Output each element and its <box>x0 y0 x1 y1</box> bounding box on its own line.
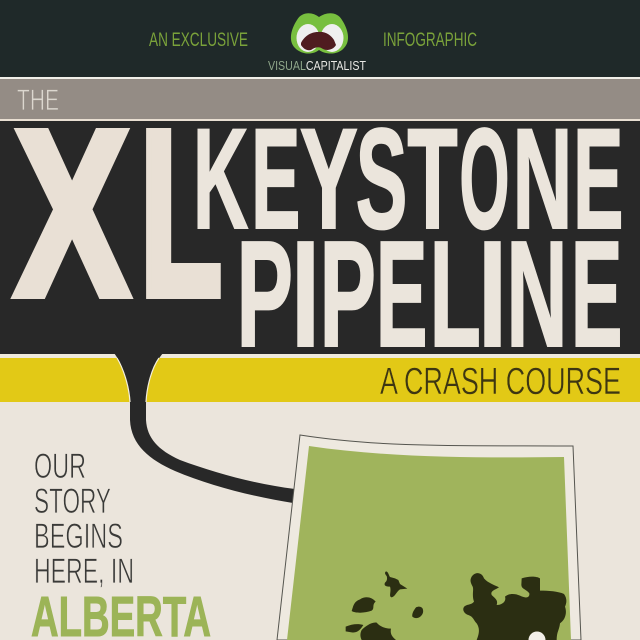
header text: infographic: INFOGRAPHIC <box>383 30 477 51</box>
band: the <box>0 79 640 121</box>
title: keystone: K <box>193 100 248 259</box>
story intro text: HERE, IN <box>34 552 134 591</box>
map marker <box>528 632 546 640</box>
title: XL: L <box>140 82 222 344</box>
header bar <box>0 0 640 79</box>
pipeline graphic <box>113 352 295 503</box>
title: pipeline: N <box>506 209 568 378</box>
title: pipeline: P <box>236 209 292 378</box>
story intro text: STORY <box>34 482 111 521</box>
title: pipeline: E <box>376 209 428 378</box>
story intro text: BEGINS <box>34 517 123 556</box>
title: keystone: Y <box>300 100 357 259</box>
title panel <box>0 82 640 378</box>
story intro text: OUR <box>34 447 86 486</box>
map: oil sands deposits <box>346 571 566 640</box>
title: keystone: T <box>407 100 458 259</box>
title: keystone: O <box>459 100 510 259</box>
logo: visual capitalist <box>268 13 366 73</box>
map: alberta <box>277 435 581 640</box>
title: pipeline: L <box>430 209 479 378</box>
title: keystone: E <box>251 100 300 259</box>
header text: an exclusive: AN EXCLUSIVE <box>149 30 248 51</box>
logo: visual capitalist: VISUALCAPITALIST <box>268 58 366 73</box>
title: keystone: N <box>512 100 572 259</box>
map frame <box>277 435 581 640</box>
story intro text <box>34 447 134 591</box>
band: a crash course <box>0 354 640 403</box>
title: pipeline: I <box>291 209 320 378</box>
title: pipeline: I <box>478 209 507 378</box>
title: keystone: S <box>356 100 407 259</box>
map land <box>287 446 571 640</box>
title: XL: X <box>16 82 128 344</box>
band: the: THE <box>17 84 59 117</box>
title: pipeline: P <box>320 209 374 378</box>
